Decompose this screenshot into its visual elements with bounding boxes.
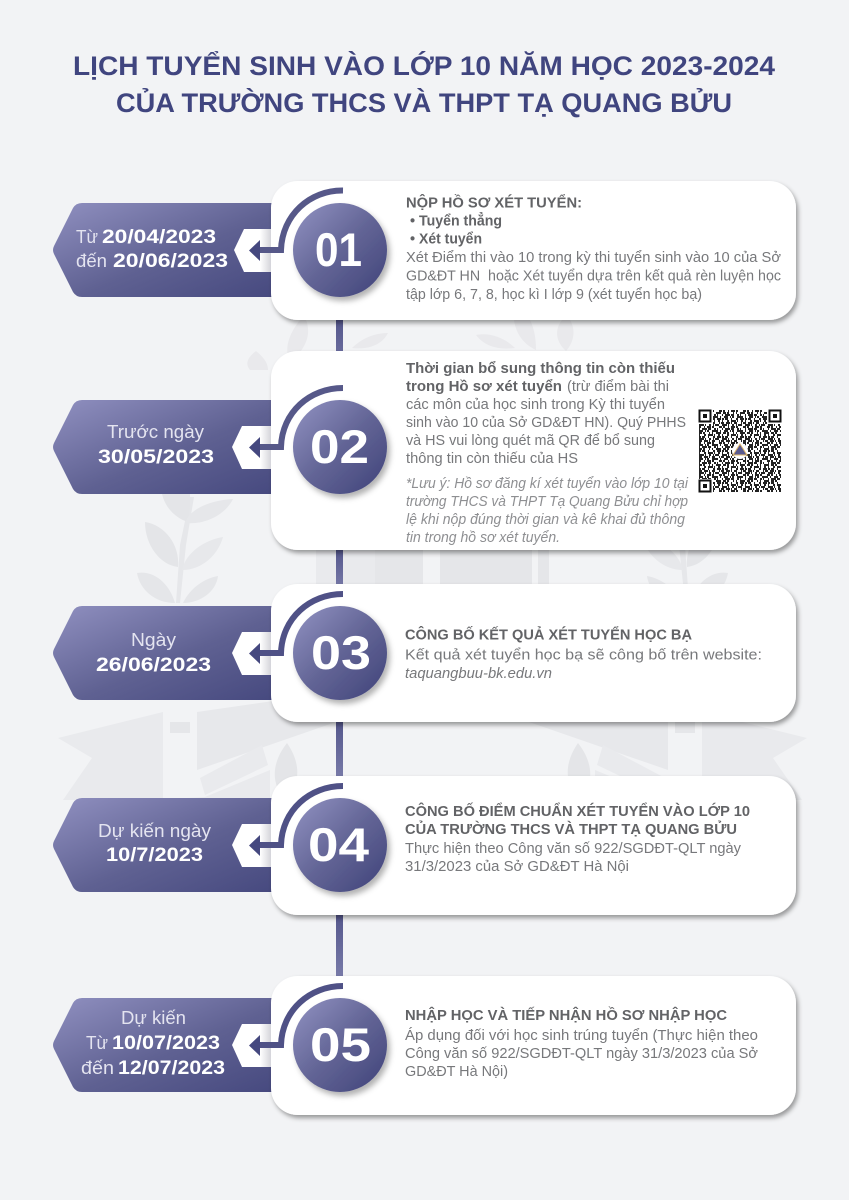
card text 3: Kết quả xét tuyển học bạ sẽ công bố trên website: bbox=[405, 648, 762, 664]
card text 1: Tuyển thẳng bbox=[419, 212, 502, 230]
date ribbon 1: 20/04/2023 bbox=[102, 227, 216, 248]
card text 4: CÔNG BỐ ĐIỂM CHUẨN XÉT TUYỂN VÀO LỚP 10 bbox=[405, 802, 750, 820]
date ribbon 3: 26/06/2023 bbox=[96, 655, 211, 676]
QR code bbox=[698, 409, 782, 494]
card text 2: (trừ điểm bài thi bbox=[567, 379, 669, 395]
arrow socket 3 bbox=[232, 632, 272, 675]
date ribbon 4: Dự kiến ngày bbox=[98, 820, 212, 841]
card text 2: tin trong hồ sơ xét tuyển. bbox=[406, 530, 560, 546]
date ribbon 2 bbox=[53, 400, 276, 494]
card text 1: • bbox=[410, 232, 415, 248]
watermark emblem bbox=[58, 320, 807, 800]
card 1 bbox=[271, 181, 796, 320]
arrow socket 2 bbox=[232, 426, 272, 469]
card text 4 bbox=[405, 802, 750, 875]
card text 2: thông tin còn thiếu của HS bbox=[406, 451, 578, 467]
watermark upper leaves bbox=[247, 320, 573, 370]
connector arrow 3 bbox=[249, 594, 343, 664]
card text 5: Công văn số 922/SGDĐT-QLT ngày 31/3/2023 của Sở bbox=[405, 1046, 758, 1062]
card text 2: các môn của học sinh trong Kỳ thi tuyển bbox=[406, 397, 665, 413]
card 2 bbox=[271, 351, 796, 550]
card text 1: Xét tuyển bbox=[419, 232, 482, 248]
connector arrow 5 bbox=[249, 986, 343, 1056]
watermark left half bbox=[58, 494, 423, 800]
step 3 bbox=[53, 584, 796, 722]
arrow socket 4 bbox=[232, 824, 272, 867]
arrow socket 5 bbox=[232, 1024, 272, 1067]
date ribbon 5 bbox=[53, 998, 276, 1092]
date ribbon 2: Trước ngày bbox=[107, 421, 205, 442]
card text 2: sinh vào 10 của Sở GD&ĐT HN). Quý PHHS bbox=[406, 415, 686, 431]
card text 1: tập lớp 6, 7, 8, học kì I lớp 9 (xét tuyển học bạ) bbox=[406, 287, 702, 303]
date ribbon 2: 30/05/2023 bbox=[98, 447, 214, 468]
title: CỦA TRƯỜNG THCS VÀ THPT TẠ QUANG BỬU bbox=[116, 86, 732, 118]
step 2 bbox=[53, 351, 796, 550]
card text 2 bbox=[406, 361, 689, 546]
date ribbon 3 bbox=[53, 606, 276, 700]
date ribbon 1: 20/06/2023 bbox=[113, 251, 228, 272]
card text 1: NỘP HỒ SƠ XÉT TUYỂN: bbox=[406, 194, 582, 212]
number badge 04 bbox=[293, 798, 387, 892]
date ribbon 4 bbox=[53, 798, 276, 892]
card text 5: NHẬP HỌC VÀ TIẾP NHẬN HỒ SƠ NHẬP HỌC bbox=[405, 1006, 728, 1024]
card text 1: GD&ĐT HN hoặc Xét tuyển dựa trên kết quả rèn luyện học bbox=[406, 268, 781, 284]
connector arrow 2 bbox=[249, 388, 343, 458]
number badge 03 bbox=[293, 606, 387, 700]
card text 2: *Lưu ý: Hồ sơ đăng kí xét tuyển vào lớp 10 tại bbox=[406, 476, 689, 492]
date ribbon 5: Dự kiến bbox=[121, 1007, 186, 1028]
card text 4: 31/3/2023 của Sở GD&ĐT Hà Nội bbox=[405, 859, 629, 875]
number badge 05: 05 bbox=[310, 1018, 371, 1071]
card text 2: trường THCS và THPT Tạ Quang Bửu chỉ hợp bbox=[406, 494, 688, 510]
card text 2: lệ khi nộp đúng thời gian và kê khai đủ thông bbox=[406, 512, 685, 528]
date ribbon 1: Từ bbox=[76, 226, 98, 247]
arrow socket 1 bbox=[234, 229, 272, 272]
vertical connector lines bbox=[336, 320, 343, 989]
card 5 bbox=[271, 976, 796, 1115]
card text 3 bbox=[405, 626, 762, 682]
number badge 03: 03 bbox=[311, 626, 371, 679]
title: LỊCH TUYỂN SINH VÀO LỚP 10 NĂM HỌC 2023-2024 bbox=[73, 50, 775, 81]
card text 4: Thực hiện theo Công văn số 922/SGDĐT-QLT ngày bbox=[405, 841, 742, 857]
card text 2: và HS vui lòng quét mã QR để bổ sung bbox=[406, 433, 655, 449]
card text 5 bbox=[405, 1006, 758, 1080]
date ribbon 3: Ngày bbox=[131, 629, 177, 650]
date ribbon 5: Từ bbox=[86, 1032, 108, 1053]
connector arrow 1 bbox=[249, 190, 343, 261]
title bbox=[73, 50, 775, 118]
date ribbon 1 bbox=[53, 203, 276, 297]
number badge 02 bbox=[293, 400, 387, 494]
number badge 01: 01 bbox=[315, 223, 362, 276]
date ribbon 5: 10/07/2023 bbox=[112, 1033, 220, 1054]
date ribbon 5: đến bbox=[81, 1057, 114, 1078]
number badge 04: 04 bbox=[308, 818, 369, 871]
card text 5: GD&ĐT Hà Nội) bbox=[405, 1064, 508, 1080]
date ribbon 4: 10/7/2023 bbox=[106, 845, 203, 866]
card 3 bbox=[271, 584, 796, 722]
card text 2: Thời gian bổ sung thông tin còn thiếu bbox=[406, 361, 675, 377]
card text 3: CÔNG BỐ KẾT QUẢ XÉT TUYỂN HỌC BẠ bbox=[405, 626, 693, 644]
watermark right half bbox=[440, 497, 807, 800]
card 4 bbox=[271, 776, 796, 915]
step 5 bbox=[53, 976, 796, 1115]
connector arrow 4 bbox=[249, 786, 343, 856]
number badge 02: 02 bbox=[310, 420, 369, 473]
number badge 01 bbox=[293, 203, 387, 297]
card text 5: Áp dụng đối với học sinh trúng tuyển (Thực hiện theo bbox=[405, 1027, 758, 1044]
card text 1: • bbox=[410, 214, 415, 230]
step 1 bbox=[53, 181, 796, 320]
date ribbon 5: 12/07/2023 bbox=[118, 1058, 225, 1079]
card text 1 bbox=[406, 194, 781, 303]
card text 4: CỦA TRƯỜNG THCS VÀ THPT TẠ QUANG BỬU bbox=[405, 820, 737, 838]
number badge 05 bbox=[293, 998, 387, 1092]
card text 1: Xét Điểm thi vào 10 trong kỳ thi tuyển sinh vào 10 của Sở bbox=[406, 250, 781, 266]
card text 2: trong Hồ sơ xét tuyển bbox=[406, 379, 562, 395]
step 4 bbox=[53, 776, 796, 915]
card text 3: taquangbuu-bk.edu.vn bbox=[405, 666, 552, 682]
date ribbon 1: đến bbox=[76, 250, 107, 271]
